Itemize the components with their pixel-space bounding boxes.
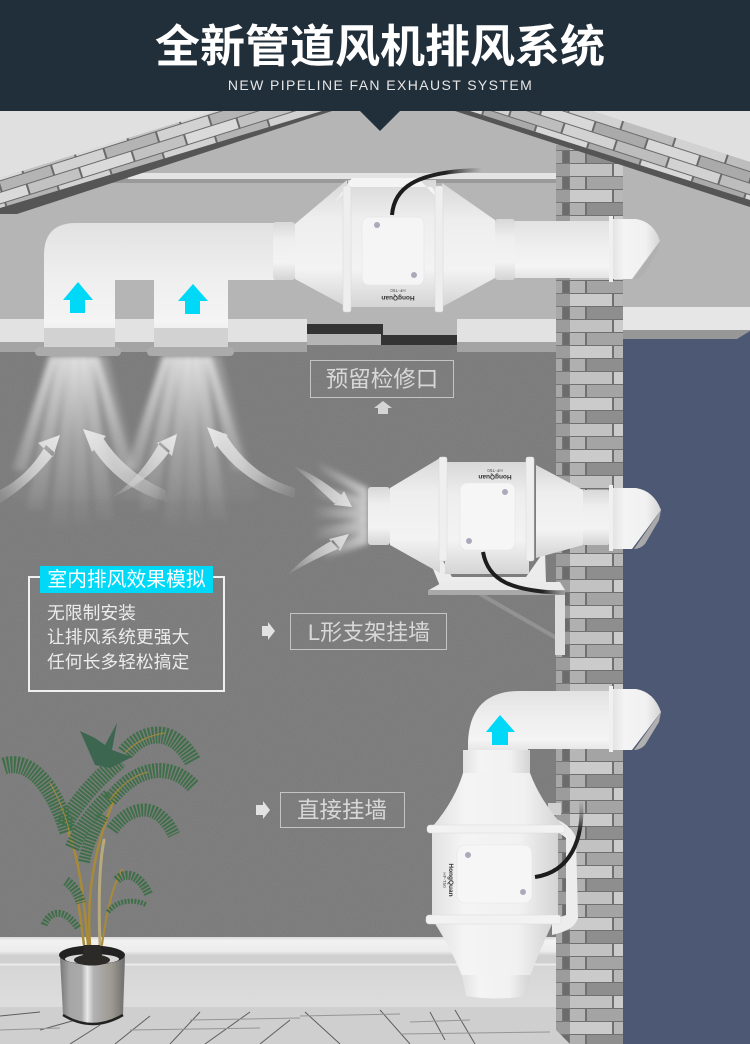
cyan arrow up 1	[63, 282, 93, 313]
fan 2 on L bracket	[368, 457, 661, 655]
cable	[535, 800, 581, 877]
top collar	[463, 750, 530, 774]
callout body text: 任何长多轻松搞定	[47, 652, 189, 672]
cyan arrow up 3	[486, 715, 515, 745]
elbow duct	[468, 691, 612, 752]
metal pot	[59, 945, 125, 1024]
baseboard	[0, 937, 556, 1008]
fan 3 vertical wall mount	[426, 686, 661, 998]
right exterior wall band	[623, 307, 750, 339]
airflow arrow into fan 2 lower	[287, 534, 349, 575]
airflow arrow 3	[112, 434, 177, 497]
frond midribs	[50, 733, 165, 835]
brand label: HongQuan	[381, 294, 415, 301]
fan body	[348, 180, 436, 307]
top mounting bracket	[335, 178, 441, 202]
callout frame	[29, 577, 224, 691]
cyan arrow up 2	[178, 284, 208, 314]
wall cap	[609, 686, 661, 752]
label: direct wall mount	[280, 792, 404, 828]
subtitle: NEW PIPELINE FAN EXHAUST SYSTEM	[228, 77, 533, 93]
body clamps	[426, 825, 565, 924]
upper cone	[433, 773, 563, 826]
label: L bracket wall mount	[290, 614, 446, 650]
plant trunks	[68, 790, 122, 945]
right arrow direct mount	[256, 801, 270, 819]
label: L bracket wall mount: L形支架挂墙	[308, 620, 430, 645]
upper wall	[0, 111, 750, 351]
side bracket	[535, 812, 578, 935]
elbow duct with two inlet legs	[44, 223, 275, 347]
curved airflow arrows, left group	[0, 427, 295, 503]
body	[432, 830, 558, 918]
label: reserved inspection port: 预留检修口	[326, 367, 438, 392]
cone right	[536, 465, 583, 558]
L bracket plate	[428, 582, 565, 595]
callout body text: 无限制安装	[47, 603, 136, 623]
brand label: HF-T50	[487, 468, 503, 473]
collar left	[368, 487, 390, 545]
ceiling slab right	[457, 319, 556, 352]
airflow arrow into fan 2 upper	[293, 466, 352, 507]
fan intake air blow	[312, 462, 368, 558]
airflow arrow 2	[83, 429, 168, 502]
wall cap	[609, 216, 660, 282]
fan left cone	[295, 180, 347, 307]
inspection opening	[307, 319, 457, 345]
callout heading tag: 室内排风效果模拟	[47, 569, 206, 591]
title: 全新管道风机排风系统	[155, 21, 605, 72]
body clamps	[343, 186, 443, 312]
label: reserved inspection port	[310, 360, 454, 398]
bottom collar	[462, 975, 530, 998]
body	[445, 462, 529, 574]
brand label: HF-T50	[390, 288, 406, 293]
wall cap	[609, 485, 661, 551]
junction box	[362, 217, 424, 285]
roof left	[0, 111, 332, 214]
junction box	[460, 483, 515, 550]
cone left	[390, 458, 440, 573]
exterior blue wall	[623, 331, 750, 1044]
L bracket diagonal strut	[480, 594, 560, 640]
right arrow L bracket	[262, 622, 275, 640]
exhaust duct	[515, 221, 610, 278]
airflow arrow 4	[207, 427, 295, 498]
brand label	[381, 288, 415, 301]
callout	[29, 566, 224, 691]
lower grey wall	[0, 345, 556, 945]
plant	[4, 723, 193, 1024]
collar right	[583, 490, 609, 545]
ceiling flanges	[35, 347, 234, 356]
fan 1 ceiling duct system	[35, 170, 660, 356]
central dark leaves	[80, 723, 132, 768]
fan left collar	[273, 222, 295, 280]
bracket cradle	[426, 550, 546, 586]
palm fronds	[4, 735, 193, 928]
brand label: HF-T50	[442, 872, 447, 888]
airflow arrow 1	[0, 435, 60, 503]
fan right collar	[495, 219, 515, 280]
attic ledge	[102, 173, 556, 183]
callout body text: 让排风系统更强大	[47, 627, 189, 647]
tiled floor	[0, 1007, 570, 1044]
duct lower translucent part	[44, 328, 228, 347]
cable	[483, 552, 568, 593]
header band	[0, 0, 750, 131]
small up arrow	[374, 401, 392, 414]
junction box	[457, 845, 532, 903]
power cable	[392, 170, 482, 215]
callout body text	[47, 603, 189, 672]
brand label	[442, 863, 454, 897]
brand label: HongQuan	[447, 863, 454, 897]
label: direct wall mount: 直接挂墙	[297, 798, 387, 823]
air intake jets	[10, 356, 258, 530]
brick column	[556, 145, 623, 1044]
small wall plate	[548, 803, 561, 815]
L bracket vertical arm	[555, 594, 565, 655]
brand label: HongQuan	[478, 473, 512, 480]
fan right cone	[442, 183, 495, 307]
body clamps	[439, 457, 534, 561]
ceiling slab left	[0, 319, 307, 352]
lower cone	[434, 922, 553, 976]
brand label	[478, 468, 512, 480]
roof right	[455, 111, 750, 207]
